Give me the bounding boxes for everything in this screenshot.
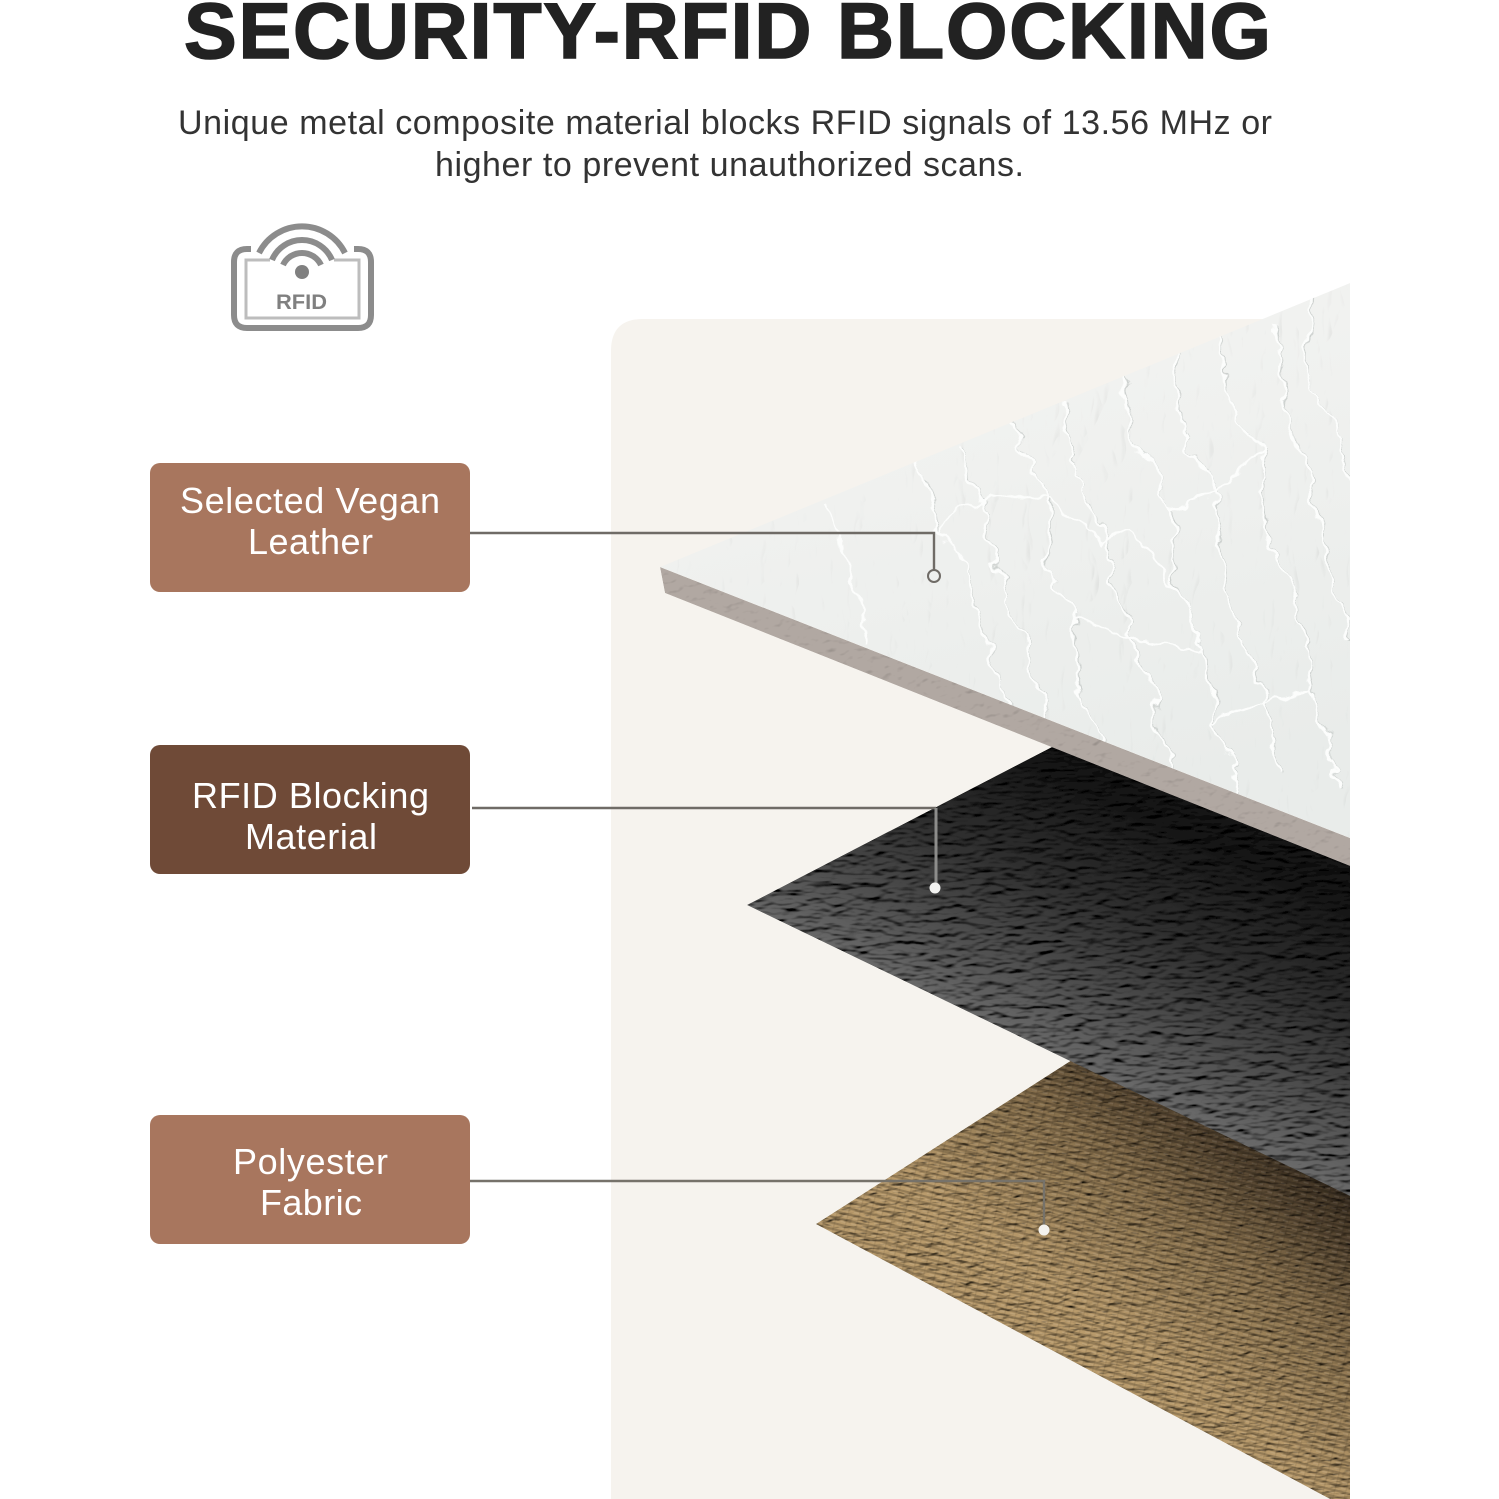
label: RFID Blocking Material: RFID Blocking [192,775,429,816]
label: Polyester Fabric: Polyester [233,1141,388,1182]
label: Selected Vegan Leather: Selected Vegan [180,480,440,521]
layer: RFID blocking material [747,747,1350,1196]
infographic canvas [150,2,1350,1499]
panel: beige background [611,319,1350,1499]
leather edge [660,567,1350,866]
leather creases [830,300,1352,792]
subtitle: Unique metal composite material blocks RFID signals of 13.56 MHz or [178,104,1272,142]
label: Polyester Fabric [150,1115,470,1244]
icon: RFID [234,226,371,328]
label: Selected Vegan Leather [150,463,470,592]
leader line: RFID material [472,808,940,894]
layer: polyester fabric [816,1010,1350,1499]
icon: RFID: RFID [276,291,327,314]
leader line: leather [470,533,940,582]
layer: vegan leather [660,283,1352,866]
label: Polyester Fabric: Fabric [260,1182,362,1223]
label: RFID Blocking Material [150,745,470,874]
label: RFID Blocking Material: Material [245,816,377,857]
leather surface [660,283,1350,838]
subtitle: higher to prevent unauthorized scans. [435,146,1024,184]
leader line: fabric [470,1181,1050,1236]
subtitle [178,104,1272,184]
label: Selected Vegan Leather: Leather [248,521,373,562]
